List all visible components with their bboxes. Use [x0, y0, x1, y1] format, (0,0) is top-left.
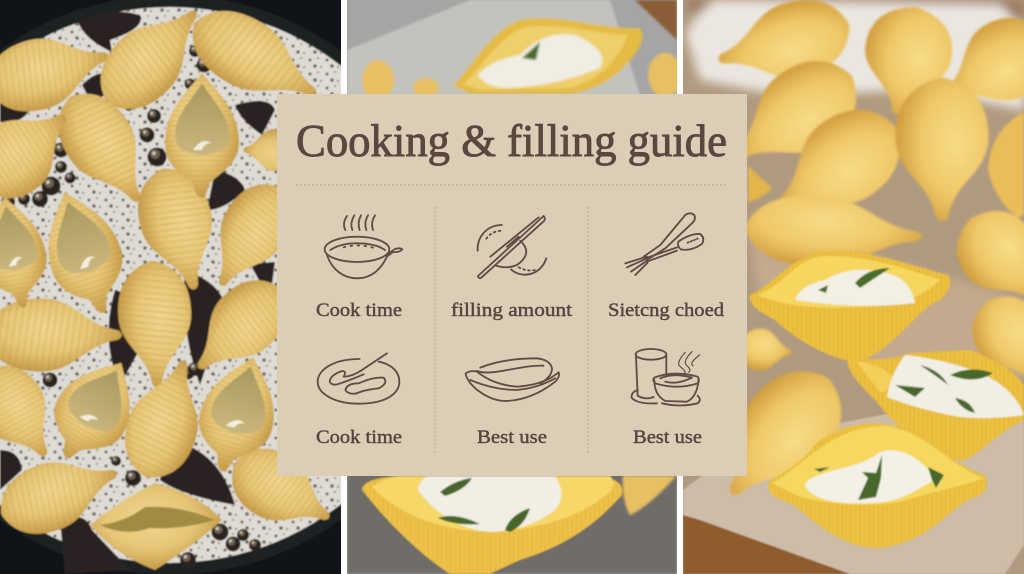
label: cook time: Cook time: [316, 427, 402, 448]
label: best use: Best use: [477, 427, 547, 448]
wooden board bottom: [683, 510, 850, 574]
parchment mid tone: [748, 220, 1024, 380]
wooden board top: [683, 0, 1024, 20]
icon: shallow dish: [466, 358, 559, 401]
icon: cup and steaming bowl: [632, 349, 700, 405]
label: cook time: Cook time: [316, 300, 402, 321]
small open shell at panel edge: [748, 166, 772, 202]
icon: filling tool and shells: [478, 216, 546, 278]
icon: fork and spoon: [625, 213, 703, 275]
dark water patches: [0, 12, 275, 574]
wood corner: [635, 0, 677, 40]
lower counter: [347, 470, 677, 574]
title: Cooking & filling guide: [296, 115, 727, 166]
filled shell right: [848, 350, 1024, 460]
panel: boiling shells in pan: [0, 0, 341, 574]
filled shell top: [453, 18, 642, 94]
parchment bottom: [683, 400, 1024, 574]
pan rim: [0, 0, 341, 574]
label: best use: Best use: [633, 427, 702, 448]
open shell at right edge: [988, 112, 1024, 218]
white parchment top: [686, 0, 1024, 110]
open pasta shells: [0, 73, 289, 481]
boiling foam: [0, 6, 341, 564]
filled shell front: [768, 423, 987, 548]
background closed shells: [716, 0, 1024, 496]
panel: prepared shells on parchment: [683, 0, 1024, 574]
wide open shell: [90, 483, 222, 570]
bubbles: [1, 45, 261, 568]
background shells: [362, 53, 682, 515]
panel: cooking and filling guide card: [277, 94, 747, 476]
panel: filling shells close-up: [347, 0, 682, 574]
filled shell bottom: [362, 476, 623, 574]
icon: plate with sauce: [318, 353, 399, 404]
icon: steaming bowl: [325, 215, 402, 278]
label: sietcng choed: Sietcng choed: [608, 300, 725, 321]
parchment background: [347, 0, 640, 95]
filled shell upper: [750, 251, 950, 362]
label: filling amount: filling amount: [451, 300, 573, 321]
closed pasta shells: [0, 0, 346, 547]
